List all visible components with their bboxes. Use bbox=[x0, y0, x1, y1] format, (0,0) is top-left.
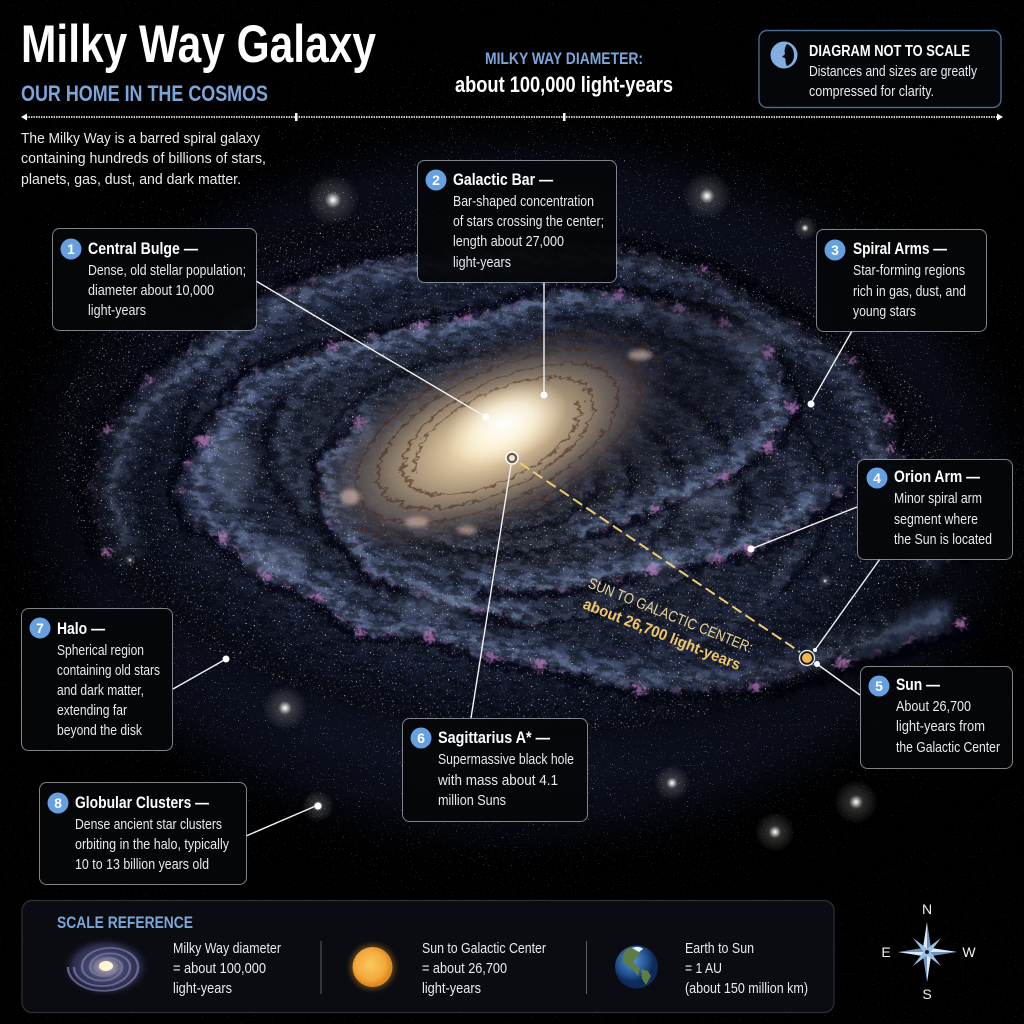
callout 8: globular clusters: Globular Clusters — bbox=[75, 794, 209, 812]
diameter label: about 100,000 light-years bbox=[455, 72, 673, 97]
sun marker bbox=[800, 650, 814, 666]
core glow bbox=[432, 364, 580, 482]
callout 2: galactic bar: light-years bbox=[453, 254, 511, 271]
callout 6: sagittarius a*: with mass about 4.1 bbox=[437, 772, 558, 789]
callout 2: galactic bar: Galactic Bar — bbox=[453, 171, 553, 189]
faint inter-arm spirals bbox=[57, 204, 953, 736]
callout 7: halo bbox=[22, 608, 172, 750]
callout 6: sagittarius a*: 6 bbox=[417, 730, 425, 746]
callout 6: sagittarius a*: Sagittarius A* — bbox=[438, 729, 550, 747]
callout 2: galactic bar: length about 27,000 bbox=[453, 233, 564, 250]
arm bands bbox=[113, 256, 939, 679]
panel: scale reference: (about 150 million km) bbox=[685, 980, 808, 997]
disc texture dark bbox=[34, 172, 976, 768]
compass: S bbox=[922, 986, 932, 1002]
icon: mini galaxy bbox=[62, 937, 150, 997]
distance label: SUN TO GALACTIC CENTER: bbox=[586, 575, 755, 657]
disc texture bright bbox=[34, 172, 976, 768]
callout 3: spiral arms: Spiral Arms — bbox=[853, 240, 947, 258]
callout 7: halo: Spherical region bbox=[57, 642, 144, 659]
panel: scale reference: Sun to Galactic Center bbox=[422, 940, 546, 957]
callout 2: galactic bar: 2 bbox=[432, 172, 440, 188]
diameter arrow bbox=[21, 113, 1003, 121]
callout 3: spiral arms: 3 bbox=[831, 242, 839, 258]
note box: compressed for clarity. bbox=[809, 83, 934, 100]
note box: Distances and sizes are greatly bbox=[809, 63, 977, 80]
panel: scale reference: light-years bbox=[422, 980, 481, 997]
panel: scale reference bbox=[22, 900, 834, 1012]
beige inner knots bbox=[340, 350, 652, 534]
callout 1: central bulge: diameter about 10,000 bbox=[88, 282, 214, 299]
callout 4: orion arm: Minor spiral arm bbox=[894, 490, 982, 507]
callout 1: central bulge: Central Bulge — bbox=[88, 240, 198, 258]
compass: W bbox=[962, 944, 976, 960]
heading: scale reference: SCALE REFERENCE bbox=[57, 913, 193, 932]
panel: scale reference: Earth to Sun bbox=[685, 940, 754, 957]
callout 1: central bulge bbox=[52, 228, 256, 330]
callout 8: globular clusters bbox=[40, 782, 246, 884]
callout 5: sun: the Galactic Center bbox=[896, 739, 1000, 756]
bulge bbox=[281, 281, 703, 599]
callout 4: orion arm: segment where bbox=[894, 511, 978, 528]
panel: scale reference: = about 26,700 bbox=[422, 960, 507, 977]
callout 7: halo: and dark matter, bbox=[57, 682, 144, 699]
spiral galaxy bbox=[0, 138, 1024, 818]
panel: scale reference: = 1 AU bbox=[685, 960, 722, 977]
callout 8: globular clusters: 10 to 13 billion years old bbox=[75, 856, 209, 873]
sun to center dashed line bbox=[520, 463, 800, 652]
callout 5: sun: Sun — bbox=[896, 676, 940, 694]
callout 3: spiral arms: Star-forming regions bbox=[853, 262, 965, 279]
callout 2: galactic bar: of stars crossing the center; bbox=[453, 213, 604, 230]
intro text: planets, gas, dust, and dark matter. bbox=[21, 171, 241, 188]
callout 4: orion arm bbox=[858, 460, 1012, 560]
callout 8: globular clusters: orbiting in the halo, typically bbox=[75, 836, 229, 853]
callout 3: spiral arms: rich in gas, dust, and bbox=[853, 283, 966, 300]
callout 6: sagittarius a*: million Suns bbox=[438, 792, 506, 809]
callout 6: sagittarius a* bbox=[402, 718, 588, 822]
diameter label bbox=[455, 49, 673, 97]
title: Milky Way Galaxy bbox=[21, 15, 376, 74]
callout 2: galactic bar: Bar-shaped concentration bbox=[453, 193, 594, 210]
callout 1: central bulge: 1 bbox=[67, 241, 75, 257]
callout 5: sun: About 26,700 bbox=[896, 698, 971, 715]
edge fade bbox=[0, 138, 1024, 818]
callout 6: sagittarius a*: Supermassive black hole bbox=[438, 751, 574, 768]
note box bbox=[759, 30, 1001, 108]
compass: N bbox=[922, 901, 932, 917]
pink star-forming clumps bbox=[103, 266, 967, 695]
callout 3: spiral arms: young stars bbox=[853, 303, 916, 320]
halo haze bbox=[0, 100, 1024, 880]
callout 8: globular clusters: 8 bbox=[54, 795, 62, 811]
compass: E bbox=[881, 944, 891, 960]
callout 1: central bulge: Dense, old stellar population; bbox=[88, 262, 246, 279]
callout 7: halo: extending far bbox=[57, 702, 127, 719]
callout 1: central bulge: light-years bbox=[88, 302, 146, 319]
blue-white arm highlights bbox=[212, 324, 781, 615]
panel: scale reference: = about 100,000 bbox=[173, 960, 266, 977]
callout 5: sun: 5 bbox=[875, 678, 883, 694]
distance label: about 26,700 light-years bbox=[581, 596, 743, 674]
callout 3: spiral arms bbox=[816, 230, 986, 332]
intro text: The Milky Way is a barred spiral galaxy bbox=[21, 130, 260, 147]
panel: scale reference: Milky Way diameter bbox=[173, 940, 281, 957]
callout 7: halo: beyond the disk bbox=[57, 722, 142, 739]
callout 5: sun: light-years from bbox=[896, 718, 985, 735]
bright foreground stars bbox=[124, 172, 878, 852]
callout 4: orion arm: the Sun is located bbox=[894, 531, 992, 548]
leader lines bbox=[173, 281, 880, 836]
icon: info bbox=[770, 42, 798, 68]
subtitle: OUR HOME IN THE COSMOS bbox=[21, 81, 268, 106]
callout 7: halo: containing old stars bbox=[57, 662, 160, 679]
intro text bbox=[21, 130, 266, 188]
callout 7: halo: 7 bbox=[36, 620, 44, 636]
callout 4: orion arm: Orion Arm — bbox=[894, 468, 980, 486]
icon: earth bbox=[615, 946, 658, 988]
diameter label: MILKY WAY DIAMETER: bbox=[485, 49, 643, 68]
callout 8: globular clusters: Dense ancient star clusters bbox=[75, 816, 222, 833]
galaxy disc and spiral arms bbox=[37, 170, 987, 786]
inner dust lanes bbox=[305, 294, 691, 578]
callout 4: orion arm: 4 bbox=[873, 470, 881, 486]
sagittarius marker bbox=[506, 452, 518, 464]
icon: sun bbox=[350, 944, 396, 990]
callout 5: sun bbox=[860, 666, 1012, 768]
callout 2: galactic bar bbox=[418, 160, 616, 282]
panel: scale reference: light-years bbox=[173, 980, 232, 997]
dark rift beside bulge bbox=[409, 257, 791, 533]
intro text: containing hundreds of billions of stars, bbox=[21, 150, 266, 167]
callout 7: halo: Halo — bbox=[57, 620, 105, 638]
note box: DIAGRAM NOT TO SCALE bbox=[809, 43, 970, 60]
compass bbox=[881, 901, 976, 1002]
